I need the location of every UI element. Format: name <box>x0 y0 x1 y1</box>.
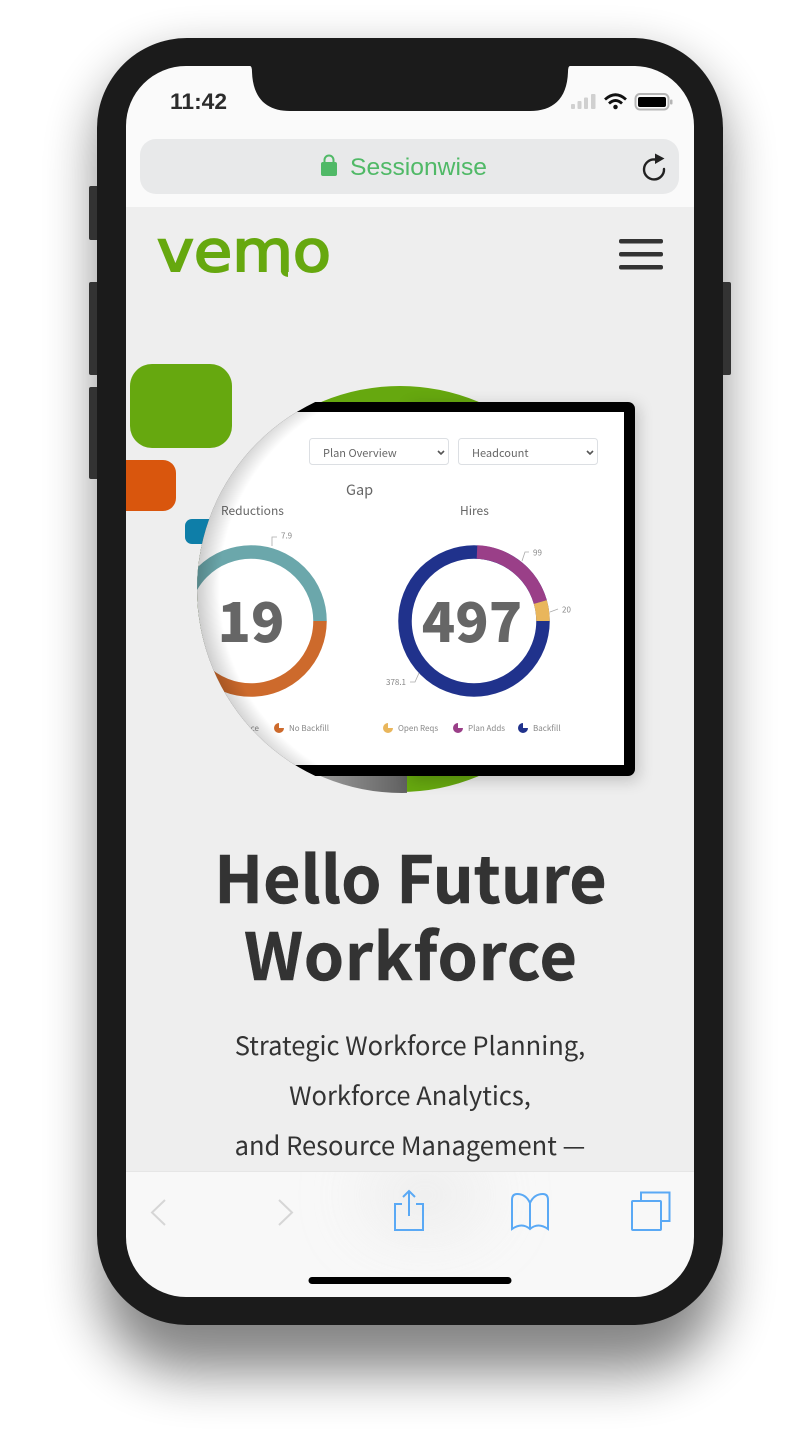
label: 378.1: 378.1 <box>386 677 406 688</box>
legend: hires <box>383 723 561 734</box>
label: 20 <box>550 606 570 612</box>
green circle backdrop <box>197 386 479 792</box>
legend: reductions: Performance <box>211 723 260 734</box>
legend: hires: Plan Adds <box>468 723 505 734</box>
side buttons <box>89 186 731 479</box>
chart heading: reductions: Reductions <box>221 502 284 519</box>
label: 99 <box>522 550 542 562</box>
decorative square: green <box>130 364 232 448</box>
dropdown: plan overview <box>310 438 448 464</box>
chart heading: hires: Hires <box>460 502 489 519</box>
legend: hires: Open Reqs <box>398 723 438 734</box>
status icon: wifi <box>605 95 626 108</box>
phone shadow <box>99 62 721 1372</box>
label: 20: 20 <box>562 604 571 616</box>
status time: 11:42 <box>170 89 227 114</box>
legend: reductions <box>251 723 329 733</box>
label: 7.9: 7.9 <box>281 530 292 542</box>
label: 7.9 <box>272 532 292 546</box>
page background <box>126 207 694 1172</box>
legend: hires: Backfill <box>533 723 561 734</box>
icon: reload <box>644 154 664 179</box>
icon: bookmarks book <box>512 1194 548 1229</box>
donut chart: hires <box>405 552 543 690</box>
logo: vemo <box>157 238 329 277</box>
monitor display <box>150 412 624 765</box>
browser bottom toolbar <box>126 1165 694 1297</box>
site name: Sessionwise <box>350 154 487 181</box>
icon: lock <box>321 156 337 176</box>
browser top area <box>126 66 694 208</box>
dropdown: plan overview: Plan Overview <box>323 445 397 461</box>
status icon: signal <box>571 94 596 109</box>
body text: and Resource Management — <box>235 1126 585 1163</box>
heading: Workforce <box>244 905 577 999</box>
icon: forward chevron <box>279 1200 292 1225</box>
monitor shadow <box>410 406 638 780</box>
label: 378.1 <box>386 673 420 685</box>
donut chart: reductions <box>182 552 320 690</box>
dropdown: headcount: Headcount <box>472 445 528 461</box>
value: 19: 19 <box>218 578 284 658</box>
phone body <box>97 38 723 1325</box>
heading: Hello Future <box>214 828 607 922</box>
logo: vemo: vemo <box>157 219 331 285</box>
dashboard monitor <box>150 402 635 776</box>
body text: Workforce Analytics, <box>289 1076 531 1113</box>
gray base of monitor <box>320 776 407 793</box>
chart title: gap: Gap <box>346 479 373 500</box>
body text <box>235 1026 585 1163</box>
icon: tabs <box>632 1192 670 1230</box>
decorative square: blue <box>185 519 209 544</box>
monitor frame <box>150 402 635 776</box>
address bar <box>140 139 679 194</box>
heading <box>220 851 604 982</box>
icon: back chevron <box>152 1200 165 1225</box>
legend: reductions: No Backfill <box>289 723 329 734</box>
label: 99: 99 <box>533 548 542 558</box>
body text: Strategic Workforce Planning, <box>235 1026 585 1063</box>
phone screen <box>110 60 694 1297</box>
decorative square: orange <box>126 460 176 511</box>
lens edge shading <box>197 412 314 765</box>
icon: share <box>395 1191 423 1230</box>
dropdown: headcount <box>458 438 598 464</box>
status icon: battery <box>636 94 672 110</box>
notch <box>240 60 580 111</box>
icon: hamburger menu <box>619 239 663 270</box>
value: 497: 497 <box>422 578 522 658</box>
home indicator <box>308 1277 512 1284</box>
